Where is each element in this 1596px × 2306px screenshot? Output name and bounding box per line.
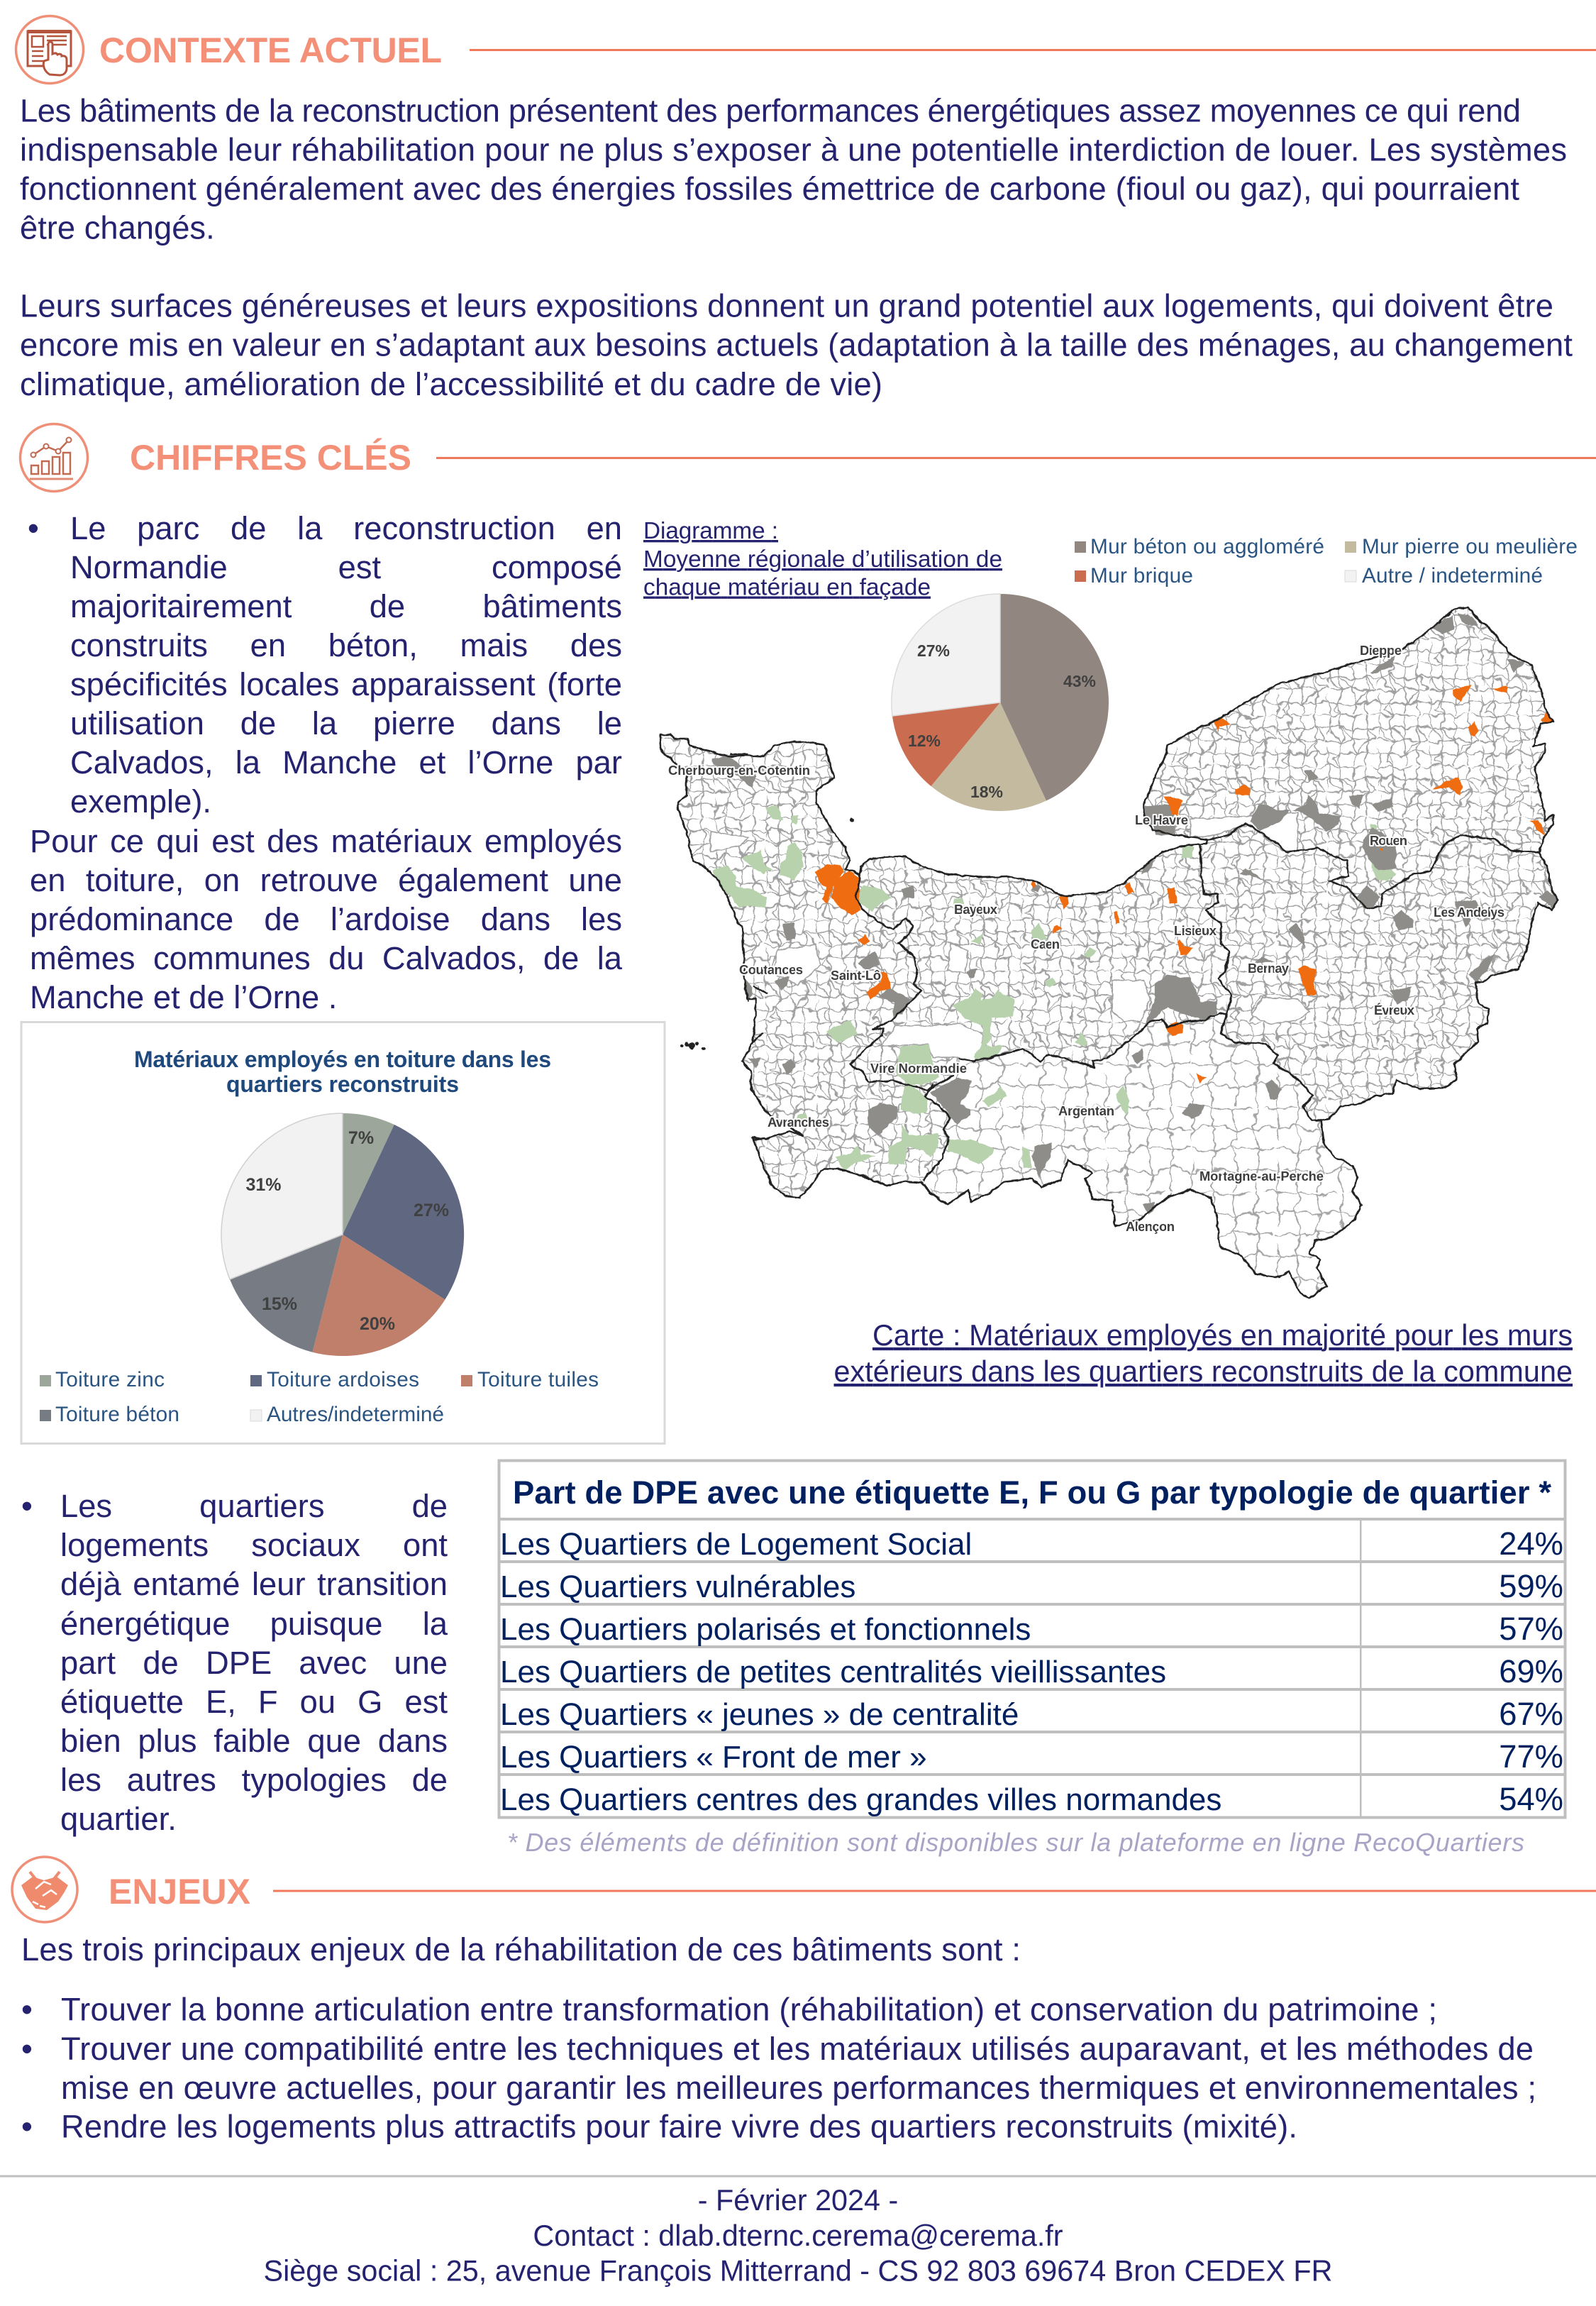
table rows: Les Quartiers de petites centralités vieillissantes: [500, 1655, 1166, 1689]
list: enjeux: Trouver la bonne articulation entre transformation (réhabilitation) et conservation du patrimoine ;: [61, 1991, 1437, 2028]
map labels: [668, 643, 1504, 1234]
heading text: ENJEUX: [109, 1872, 250, 1911]
legend: facade materials: Mur brique: [1090, 564, 1193, 587]
section heading: contexte actuel: [16, 16, 1596, 84]
pie chart: roof materials: 20%: [360, 1314, 395, 1334]
pie chart: facade materials: 12%: [908, 732, 941, 750]
heading: diagramme facade: [643, 518, 1002, 600]
map labels: Saint-Lô: [831, 968, 881, 983]
map labels: Caen: [1031, 937, 1060, 951]
map labels: Mortagne-au-Perche: [1199, 1169, 1324, 1184]
text block: parc de la reconstruction: Le parc de la reconstruction en: [70, 510, 622, 546]
legend: roof materials: [40, 1368, 599, 1426]
panel: roof materials chart: [21, 1022, 665, 1443]
pie chart: roof materials: 15%: [262, 1294, 297, 1314]
list: enjeux: •: [21, 2031, 33, 2067]
text block: parc de la reconstruction: Normandie est composé: [70, 549, 622, 585]
map labels: Vire Normandie: [870, 1061, 967, 1076]
footer: - Février 2024 -: [698, 2184, 898, 2217]
map labels: Évreux: [1374, 1003, 1415, 1017]
map labels: Bernay: [1248, 961, 1290, 976]
map boundaries: departments and coast: [660, 607, 1558, 1298]
text block: matériaux en toiture: prédominance de l’ardoise dans les: [30, 901, 622, 937]
text block: contexte paragraphs: fonctionnent généralement avec des énergies fossiles émettrice de carbone (fioul ou gaz), qui pourraient: [20, 170, 1519, 207]
footer: Siège social : 25, avenue François Mitterrand - CS 92 803 69674 Bron CEDEX FR: [264, 2255, 1332, 2288]
pie chart: roof materials: 31%: [245, 1175, 282, 1195]
pie chart: roof materials: 7%: [348, 1128, 374, 1148]
text block: matériaux en toiture: Pour ce qui est des matériaux employés: [30, 823, 622, 859]
pie chart: facade materials: [892, 594, 1109, 811]
text block: enjeux intro: Les trois principaux enjeux de la réhabilitation de ces bâtiments sont :: [21, 1931, 1021, 1968]
chart title: [134, 1047, 551, 1097]
text block: logements sociaux: quartier.: [60, 1801, 177, 1837]
icon: tablet and pointing hand: [16, 16, 84, 84]
table rows: 54%: [1499, 1781, 1563, 1817]
legend: roof materials: Toiture ardoises: [267, 1368, 419, 1391]
footer: [264, 2184, 1332, 2288]
legend: roof materials: Autres/indeterminé: [267, 1403, 444, 1426]
text block: parc de la reconstruction: utilisation de la pierre dans le: [70, 705, 622, 741]
text block: contexte paragraphs: être changés.: [20, 210, 215, 246]
legend: facade materials: [1075, 535, 1578, 587]
caption: map: Carte : Matériaux employés en majorité pour les murs: [872, 1319, 1573, 1352]
section heading: chiffres clés: [20, 424, 1596, 491]
map labels: Alençon: [1126, 1219, 1175, 1234]
table rows: Les Quartiers polarisés et fonctionnels: [500, 1612, 1031, 1647]
map patches: stone (green): [712, 805, 1097, 1120]
text block: matériaux en toiture: [30, 823, 622, 1015]
map labels: Argentan: [1058, 1103, 1114, 1118]
table rows: Les Quartiers centres des grandes villes normandes: [500, 1782, 1221, 1817]
table rows: Les Quartiers « jeunes » de centralité: [500, 1697, 1019, 1732]
map labels: Cherbourg-en-Cotentin: [668, 763, 810, 778]
icon: handshake: [12, 1857, 77, 1922]
legend: roof materials: Toiture tuiles: [477, 1368, 599, 1391]
text block: logements sociaux: les autres typologies de: [60, 1762, 448, 1798]
text block: logements sociaux: Les quartiers de: [60, 1488, 448, 1524]
text block: parc de la reconstruction: majoritairement de bâtiments: [70, 588, 622, 624]
table rows: 59%: [1499, 1568, 1563, 1604]
pie chart: roof materials: [221, 1113, 464, 1356]
text block: logements sociaux: part de DPE avec une: [60, 1645, 448, 1681]
pie chart: facade materials: 43%: [1063, 672, 1096, 690]
footnote: * Des éléments de définition sont disponibles sur la plateforme en ligne RecoQuartiers: [507, 1828, 1524, 1857]
table rows: 69%: [1499, 1653, 1563, 1689]
table header: Part de DPE avec une étiquette E, F ou G par typologie de quartier *: [513, 1474, 1551, 1511]
caption: map: [834, 1319, 1573, 1388]
text: •: [21, 1488, 33, 1524]
map labels: Rouen: [1370, 833, 1407, 848]
legend: facade materials: Autre / indeterminé: [1362, 564, 1543, 587]
legend: roof materials: Toiture zinc: [55, 1368, 165, 1391]
map labels: Dieppe: [1360, 643, 1402, 658]
text block: contexte paragraphs: Les bâtiments de la reconstruction présentent des performances énergétiques assez moyennes ce qui rend: [20, 92, 1521, 129]
heading: diagramme facade: chaque matériau en façade: [643, 575, 931, 600]
text block: matériaux en toiture: en toiture, on retrouve également une: [30, 862, 622, 898]
text block: contexte paragraphs: encore mis en valeur en s’adaptant aux besoins actuels (adaptation à la taille des ménages, au changement: [20, 326, 1573, 363]
text block: contexte paragraphs: Leurs surfaces généreuses et leurs expositions donnent un grand potentiel aux logements, qui doivent être: [20, 288, 1553, 324]
table rows: 57%: [1499, 1611, 1563, 1647]
text block: parc de la reconstruction: construits en béton, mais des: [70, 627, 622, 663]
caption: map: extérieurs dans les quartiers reconstruits de la commune: [834, 1355, 1573, 1388]
list: enjeux: Rendre les logements plus attractifs pour faire vivre des quartiers reconstruits (mixité).: [61, 2109, 1297, 2144]
section heading: enjeux: [12, 1857, 1596, 1922]
text block: parc de la reconstruction: [28, 510, 622, 820]
text block: contexte paragraphs: [20, 92, 1573, 402]
footer: Contact : dlab.dternc.cerema@cerema.fr: [533, 2219, 1063, 2252]
list: enjeux: Trouver une compatibilité entre les techniques et les matériaux utilisés auparavant, et les méthodes de: [61, 2031, 1534, 2067]
text block: logements sociaux: étiquette E, F ou G est: [60, 1684, 448, 1720]
heading text: CONTEXTE ACTUEL: [99, 31, 442, 70]
map labels: Coutances: [739, 962, 803, 977]
text block: contexte paragraphs: climatique, amélioration de l’accessibilité et du cadre de vie): [20, 366, 882, 402]
table rows: Les Quartiers « Front de mer »: [500, 1740, 927, 1775]
table rows: 67%: [1499, 1696, 1563, 1732]
pie chart: roof materials: 27%: [414, 1201, 449, 1220]
pie chart: facade materials: 27%: [917, 641, 950, 660]
text block: matériaux en toiture: Manche et de l’Orne .: [30, 979, 337, 1015]
list: enjeux: [21, 1991, 1536, 2144]
pie chart: facade materials: 18%: [970, 783, 1003, 801]
table rows: 24%: [1499, 1526, 1563, 1562]
table rows: Les Quartiers vulnérables: [500, 1569, 855, 1604]
list: enjeux: mise en œuvre actuelles, pour garantir les meilleures performances thermiques et environnementales ;: [61, 2070, 1536, 2106]
legend: facade materials: Mur pierre ou meulière: [1362, 535, 1578, 558]
table rows: 77%: [1499, 1738, 1563, 1775]
text block: logements sociaux: [21, 1488, 448, 1837]
chart title: quartiers reconstruits: [226, 1071, 459, 1097]
chart title: Matériaux employés en toiture dans les: [134, 1047, 551, 1072]
text block: parc de la reconstruction: exemple).: [70, 783, 211, 820]
map labels: Le Havre: [1135, 812, 1188, 827]
table rows: Les Quartiers de Logement Social: [500, 1527, 972, 1562]
text block: parc de la reconstruction: spécificités locales apparaissent (forte: [70, 666, 622, 702]
heading: diagramme facade: Diagramme :: [643, 518, 778, 544]
map patches: brick (orange): [815, 865, 1068, 1000]
text block: contexte paragraphs: indispensable leur réhabilitation pour ne plus s’exposer à une potentielle interdiction de louer. Les systèmes: [20, 132, 1567, 167]
text block: parc de la reconstruction: Calvados, la Manche et l’Orne par: [70, 744, 622, 780]
text: •: [28, 510, 39, 546]
icon: chart: [20, 424, 88, 491]
text block: logements sociaux: énergétique puisque la: [60, 1606, 448, 1642]
table rows: [500, 1526, 1563, 1817]
map islands: [680, 754, 854, 1050]
map labels: Les Andelys: [1434, 905, 1504, 920]
list: enjeux: •: [21, 2109, 33, 2144]
legend: facade materials: Mur béton ou aggloméré: [1090, 535, 1324, 558]
map labels: Avranches: [767, 1115, 829, 1130]
heading: diagramme facade: Moyenne régionale d’utilisation de: [643, 546, 1002, 573]
map labels: Bayeux: [954, 902, 998, 917]
map: Normandie communes by majority wall material: [659, 606, 1559, 1298]
table: part de DPE E, F ou G: [498, 1460, 1566, 1818]
heading text: CHIFFRES CLÉS: [130, 438, 411, 478]
text block: logements sociaux: déjà entamé leur transition: [60, 1566, 448, 1602]
legend: roof materials: Toiture béton: [55, 1403, 179, 1426]
map patches: concrete (grey): [712, 755, 1041, 1135]
text block: logements sociaux: logements sociaux ont: [60, 1527, 448, 1563]
map labels: Lisieux: [1174, 923, 1217, 938]
list: enjeux: •: [21, 1991, 33, 2028]
text block: logements sociaux: bien plus faible que dans: [60, 1723, 448, 1759]
text block: matériaux en toiture: mêmes communes du Calvados, de la: [30, 940, 622, 976]
